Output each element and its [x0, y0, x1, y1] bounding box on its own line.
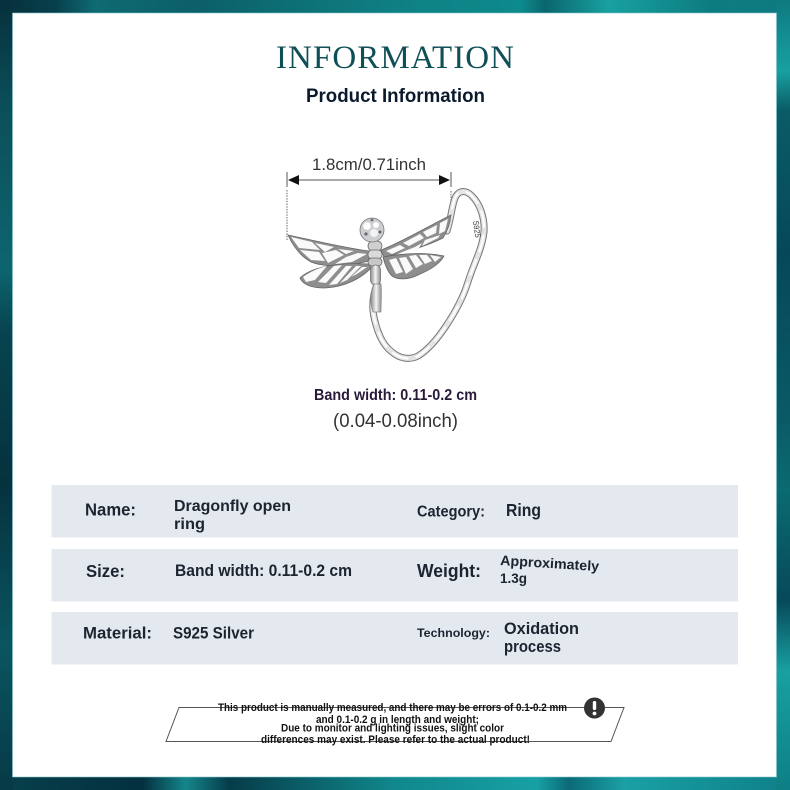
weight value: Approximately [500, 552, 600, 574]
spec row 3 [52, 612, 738, 664]
spec row 2 [52, 549, 738, 602]
crystal gem [360, 218, 384, 242]
upper left wing [288, 235, 369, 266]
disclaimer text: and 0.1-0.2 g in length and weight; [316, 714, 479, 726]
category value: Ring [506, 500, 541, 520]
name value [174, 498, 291, 533]
name value: Dragonfly open [174, 498, 291, 515]
width dimension arrow [287, 172, 451, 240]
technology label: Technology: [417, 626, 490, 640]
weight label: Weight: [417, 560, 481, 581]
disclaimer text: This product is manually measured, and there may be errors of 0.1-0.2 mm [218, 702, 567, 714]
product photo: dragonfly ring [288, 192, 484, 358]
size label: Size: [86, 561, 125, 581]
category label: Category: [417, 504, 485, 520]
disclaimer text [218, 702, 567, 746]
name label: Name: [85, 500, 136, 520]
technology value [504, 620, 579, 656]
lower left wing [300, 264, 371, 288]
material value: S925 Silver [173, 624, 255, 642]
width dimension label: 1.8cm/0.71inch [312, 155, 426, 174]
technology value: Oxidation [504, 620, 579, 638]
band width in inches: (0.04-0.08inch) [333, 411, 458, 432]
disclaimer text: differences may exist. Please refer to the actual product! [261, 734, 530, 746]
name value: ring [174, 516, 205, 533]
icon: warning exclamation [584, 698, 605, 718]
dragonfly body [368, 241, 382, 312]
spec row 1 [52, 485, 738, 538]
band width label: Band width: 0.11-0.2 cm [314, 387, 477, 404]
S925 stamp: S925 [471, 220, 482, 239]
disclaimer box [166, 698, 624, 746]
disclaimer text: Due to monitor and lighting issues, slight color [281, 722, 504, 734]
size value: Band width: 0.11-0.2 cm [175, 562, 352, 580]
material label: Material: [83, 624, 152, 642]
subtitle: Product Information [306, 85, 485, 107]
title: INFORMATION [276, 40, 514, 76]
technology value: process [504, 638, 561, 656]
ring band [373, 192, 484, 358]
weight value [500, 552, 600, 586]
weight value: 1.3g [500, 570, 527, 586]
upper right wing [381, 215, 451, 257]
lower right wing [383, 253, 444, 279]
